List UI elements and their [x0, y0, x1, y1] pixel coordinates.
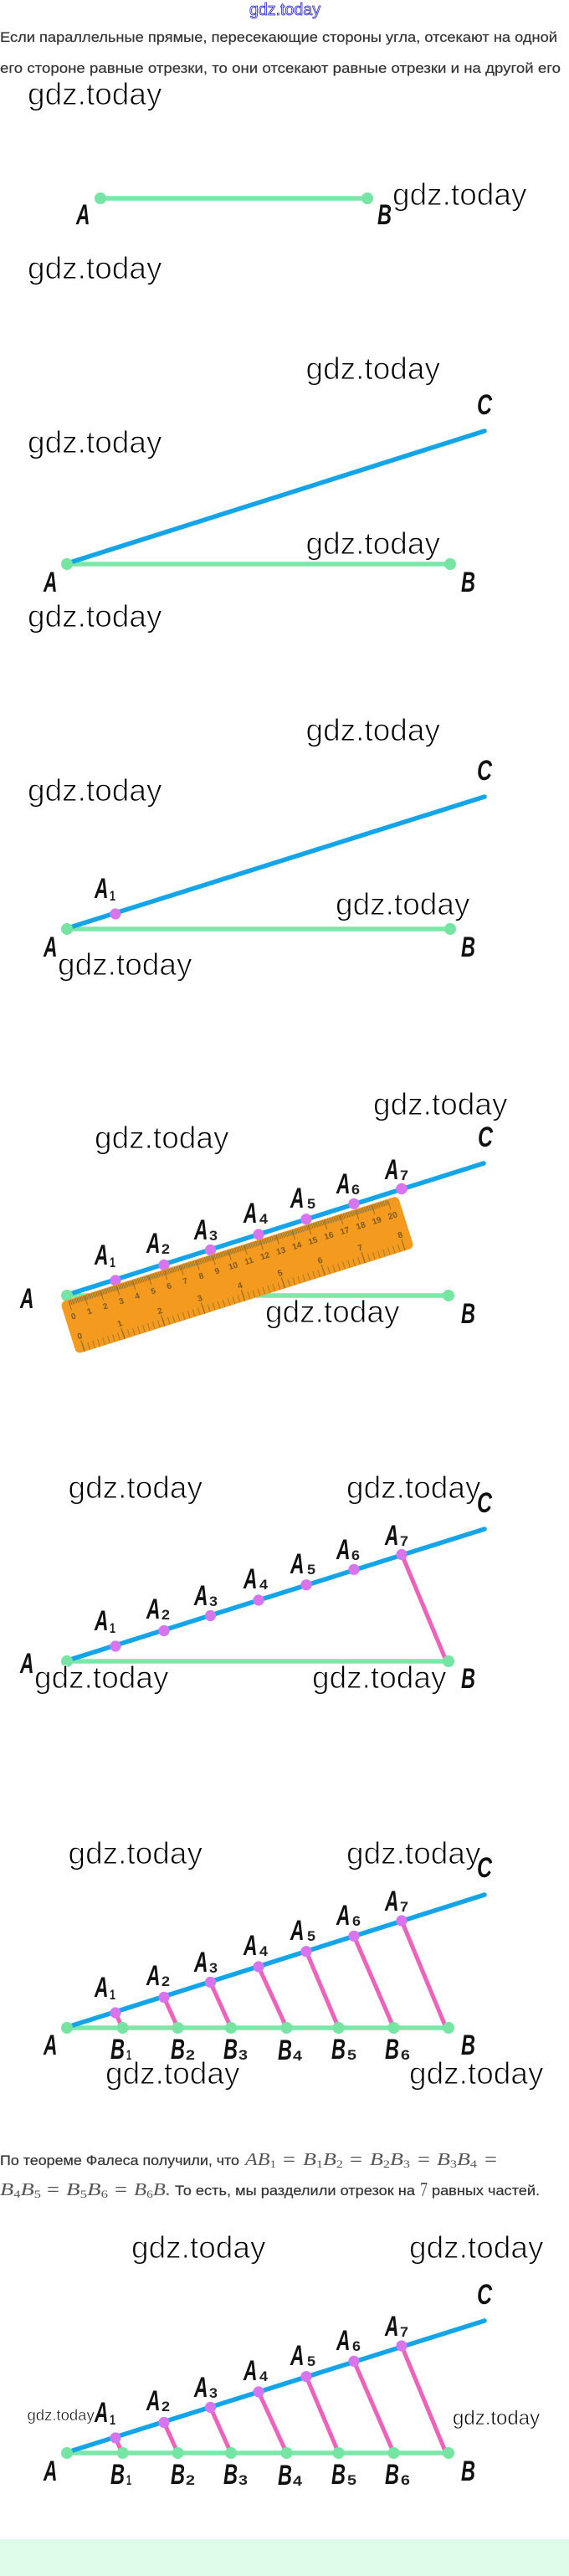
conclusion text: B	[437, 2149, 448, 2169]
centimetre numbers: 0	[70, 1311, 78, 1322]
label B1: 1	[126, 2472, 131, 2488]
centimetre numbers: 19	[371, 1215, 383, 1227]
inch numbers: 8	[397, 1230, 404, 1241]
label A5: A	[290, 2340, 305, 2372]
diagram 7: final construction	[43, 2279, 492, 2491]
watermark: gdz.today	[28, 251, 162, 285]
conclusion text: По теореме Фалеса получили, что	[0, 2153, 239, 2168]
label A4: 4	[259, 1211, 269, 1227]
label B1: B	[110, 2459, 125, 2491]
label B5: 5	[347, 2047, 356, 2063]
label B3: 3	[238, 2047, 248, 2063]
inch numbers: 1	[116, 1319, 124, 1329]
watermark: gdz.today	[69, 1470, 202, 1505]
label B: B	[461, 567, 475, 598]
centimetre numbers: 5	[150, 1286, 157, 1297]
label A3: 3	[209, 1228, 218, 1244]
label A2: 2	[161, 1241, 170, 1257]
intro text: его стороне равные отрезки, то они отсекают равные отрезки и на другой его	[0, 60, 561, 76]
label B2: B	[171, 2459, 185, 2491]
label A4: 4	[259, 1577, 269, 1593]
conclusion text: B	[323, 2149, 336, 2169]
conclusion text: 2	[383, 2158, 390, 2170]
conclusion text: 6	[101, 2188, 109, 2200]
label A7: 7	[400, 1533, 408, 1549]
label A: A	[19, 1283, 33, 1315]
conclusion text: B	[134, 2179, 145, 2199]
label A5: A	[290, 1183, 305, 1214]
label A4: A	[243, 1930, 258, 1962]
label C: C	[477, 755, 492, 787]
conclusion text: 5	[80, 2188, 87, 2200]
label B4: 4	[293, 2048, 303, 2064]
label A3: A	[193, 2372, 208, 2404]
conclusion text: 6	[146, 2188, 153, 2200]
label C: C	[477, 2279, 492, 2311]
label B6: 6	[401, 2047, 410, 2063]
conclusion text: 4	[13, 2188, 21, 2200]
small watermark: gdz.today	[453, 2407, 540, 2430]
centimetre numbers: 6	[166, 1281, 173, 1291]
label A3: 3	[209, 1593, 218, 1609]
conclusion text: 1	[316, 2158, 323, 2170]
watermark: gdz.today	[346, 1836, 481, 1870]
watermark: gdz.today	[69, 1836, 202, 1870]
label A2: A	[146, 1593, 161, 1625]
watermark: gdz.today	[409, 2230, 544, 2265]
label A6: A	[336, 1168, 350, 1200]
label A5: A	[290, 1548, 305, 1580]
centimetre numbers: 12	[259, 1250, 271, 1262]
label A: A	[43, 2455, 57, 2487]
conclusion text: То есть, мы разделили отрезок на	[175, 2183, 416, 2199]
watermark: gdz.today	[105, 2056, 240, 2091]
conclusion text: B.	[153, 2179, 171, 2199]
label A: A	[19, 1648, 33, 1680]
conclusion text: B	[66, 2179, 77, 2199]
watermark: gdz.today	[392, 177, 527, 212]
label A2: 2	[161, 1973, 170, 1989]
watermark: gdz.today	[409, 2056, 544, 2091]
inch numbers	[76, 1230, 404, 1342]
page header logo: gdz.today	[249, 1, 320, 19]
conclusion text: B	[20, 2179, 34, 2199]
label B3: B	[223, 2034, 238, 2065]
label B1: B	[110, 2034, 125, 2065]
label A2: 2	[161, 2399, 170, 2414]
label A6: 6	[351, 1547, 360, 1563]
label A7: 7	[400, 1167, 408, 1183]
label B6: B	[385, 2034, 399, 2065]
label A3: 3	[209, 2385, 218, 2401]
footer band	[0, 2539, 569, 2576]
centimetre numbers: 11	[243, 1255, 255, 1267]
label A4: A	[243, 2355, 258, 2387]
label B: B	[461, 931, 475, 963]
conclusion text: 3	[403, 2158, 410, 2170]
watermark: gdz.today	[306, 352, 440, 386]
label A5: 5	[307, 2353, 315, 2369]
conclusion text: =	[115, 2179, 127, 2201]
conclusion text: AB	[245, 2149, 267, 2169]
label B6: B	[385, 2459, 399, 2491]
centimetre numbers: 8	[197, 1271, 205, 1281]
label A6: 6	[352, 2338, 361, 2354]
label A: A	[75, 199, 90, 231]
label A6: A	[336, 2325, 350, 2357]
label A3: A	[193, 1214, 208, 1246]
label A3: A	[193, 1947, 208, 1978]
label A6: A	[336, 1534, 350, 1566]
label B4: 4	[293, 2473, 303, 2489]
centimetre numbers: 4	[134, 1291, 141, 1302]
label A7: 7	[400, 1899, 408, 1915]
watermark: gdz.today	[265, 1295, 400, 1329]
label A7: A	[384, 1154, 398, 1186]
conclusion text: 5	[34, 2188, 41, 2200]
diagram 3: point A1 on ray	[43, 755, 492, 963]
label C: C	[477, 1487, 492, 1519]
watermark: gdz.today	[306, 526, 440, 561]
label A1: 1	[110, 1620, 115, 1636]
intro text: Если параллельные прямые, пересекающие стороны угла, отсекают на одной	[0, 29, 557, 45]
label B5: B	[331, 2034, 346, 2065]
watermark: gdz.today	[34, 1660, 169, 1695]
centimetre numbers: 17	[339, 1225, 351, 1237]
conclusion text: 4	[470, 2158, 478, 2170]
intro text	[0, 29, 561, 76]
label B5: B	[331, 2459, 346, 2491]
label B: B	[377, 199, 392, 231]
conclusion text: 2	[336, 2158, 343, 2170]
watermark: gdz.today	[306, 713, 440, 747]
inch numbers: 3	[197, 1294, 204, 1304]
label A1: 1	[110, 1987, 115, 2003]
inch numbers: 6	[316, 1256, 325, 1266]
inch numbers: 7	[356, 1243, 364, 1254]
watermark: gdz.today	[28, 599, 162, 634]
label B5: 5	[347, 2472, 356, 2488]
label B6: 6	[401, 2472, 410, 2488]
ruler	[60, 1196, 414, 1354]
conclusion text	[0, 2149, 540, 2201]
label A1: A	[94, 1972, 109, 2004]
label A4: 4	[259, 1943, 269, 1959]
conclusion text: =	[47, 2179, 59, 2201]
conclusion text: 1	[270, 2158, 276, 2170]
centimetre numbers: 1	[86, 1306, 94, 1317]
diagram 4: ruler marks seven equal segments	[19, 1121, 493, 1354]
label B: B	[461, 2455, 475, 2487]
label B3: 3	[238, 2472, 248, 2488]
label A7: A	[384, 1886, 398, 1917]
label A1: 1	[110, 888, 115, 904]
label A2: A	[146, 1960, 161, 1992]
conclusion text: 7	[420, 2179, 428, 2201]
conclusion text: B	[370, 2149, 381, 2169]
label B: B	[461, 1298, 475, 1330]
label A1: A	[94, 1239, 109, 1271]
label A7: A	[384, 2311, 398, 2343]
label A4: A	[243, 1563, 258, 1595]
label A5: 5	[307, 1928, 315, 1944]
centimetre numbers: 20	[387, 1210, 399, 1222]
label A5: 5	[307, 1196, 315, 1212]
label A5: A	[290, 1915, 305, 1947]
label A4: A	[243, 1198, 258, 1229]
label B2: 2	[186, 2047, 195, 2063]
label B1: 1	[126, 2047, 131, 2063]
watermark: gdz.today	[131, 2230, 266, 2265]
centimetre numbers: 13	[275, 1245, 287, 1257]
conclusion text: =	[418, 2149, 430, 2171]
label C: C	[477, 1852, 492, 1884]
watermark: gdz.today	[28, 773, 162, 808]
centimetre numbers	[70, 1210, 399, 1322]
inch numbers: 4	[237, 1281, 244, 1291]
label C: C	[477, 389, 492, 421]
conclusion text: равных частей.	[432, 2183, 540, 2199]
label B: B	[461, 2029, 475, 2061]
label A2: A	[146, 2385, 161, 2417]
label A1: A	[94, 873, 109, 905]
diagram 5: segment A7B drawn	[19, 1487, 492, 1695]
conclusion text: B	[457, 2149, 470, 2169]
label A6: 6	[352, 1913, 361, 1929]
label C: C	[478, 1121, 493, 1153]
label A: A	[43, 931, 57, 963]
centimetre numbers: 15	[307, 1235, 319, 1247]
label A2: 2	[161, 1607, 170, 1623]
watermark: gdz.today	[336, 887, 470, 921]
diagram 1: segment AB	[75, 192, 392, 231]
centimetre numbers: 7	[182, 1276, 189, 1286]
conclusion text: B	[87, 2179, 101, 2199]
watermark: gdz.today	[373, 1087, 508, 1121]
label A7: A	[384, 1520, 398, 1552]
label B4: B	[278, 2460, 292, 2491]
watermark: gdz.today	[346, 1470, 481, 1505]
small watermark: gdz.today	[27, 2406, 95, 2424]
centimetre numbers: 18	[355, 1220, 367, 1232]
label A6: 6	[351, 1182, 360, 1198]
diagram 2: angle with ray AC	[43, 389, 492, 598]
conclusion text: B	[303, 2149, 314, 2169]
label B: B	[461, 1663, 475, 1695]
label A3: A	[193, 1580, 208, 1612]
label A7: 7	[400, 2324, 408, 2340]
conclusion text: B	[0, 2179, 11, 2199]
centimetre numbers: 3	[118, 1296, 126, 1307]
label A1: 1	[110, 2412, 115, 2428]
inch numbers: 2	[156, 1306, 164, 1316]
label A1: A	[94, 2397, 109, 2429]
centimetre numbers: 9	[213, 1266, 221, 1276]
conclusion text: B	[390, 2149, 403, 2169]
label B3: B	[223, 2459, 238, 2491]
conclusion text: 3	[450, 2158, 457, 2170]
centimetre numbers: 10	[228, 1260, 239, 1272]
label A: A	[43, 567, 57, 598]
label A5: 5	[307, 1562, 315, 1578]
label B2: 2	[186, 2472, 195, 2488]
conclusion text: =	[484, 2149, 497, 2171]
watermark: gdz.today	[28, 77, 162, 111]
inch numbers: 5	[277, 1269, 284, 1279]
centimetre numbers: 14	[291, 1240, 303, 1252]
watermark: gdz.today	[312, 1660, 447, 1695]
label A2: A	[146, 1228, 161, 1260]
conclusion text: =	[283, 2149, 295, 2171]
label A4: 4	[259, 2368, 269, 2384]
label A3: 3	[209, 1960, 218, 1976]
label B2: B	[171, 2034, 185, 2065]
label A6: A	[336, 1900, 350, 1932]
watermark: gdz.today	[95, 1121, 229, 1155]
watermark: gdz.today	[28, 425, 162, 459]
centimetre numbers: 16	[323, 1230, 336, 1242]
diagram 6: parallel lines through A points	[43, 1852, 492, 2066]
centimetre numbers: 2	[102, 1301, 110, 1312]
label B4: B	[278, 2035, 292, 2066]
conclusion text: =	[350, 2149, 362, 2171]
inch numbers: 0	[76, 1332, 84, 1342]
label A: A	[43, 2029, 57, 2061]
watermark: gdz.today	[58, 947, 192, 982]
label A1: A	[94, 1605, 109, 1637]
label A1: 1	[110, 1255, 115, 1270]
